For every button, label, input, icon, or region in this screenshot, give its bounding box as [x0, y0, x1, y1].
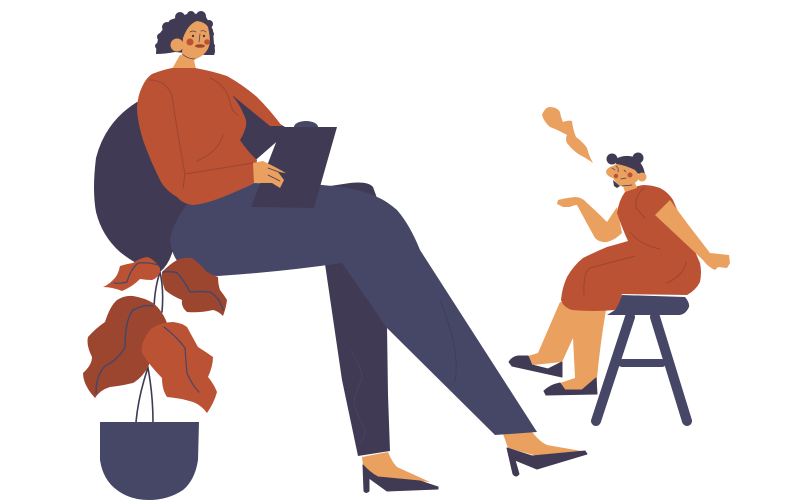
clipboard clip	[294, 121, 318, 133]
facial features	[612, 166, 632, 186]
raised arm	[557, 197, 622, 242]
back leg crease	[351, 351, 365, 444]
leaf: top right	[162, 258, 227, 316]
clipboard	[251, 127, 337, 208]
leaf: big right	[142, 322, 217, 413]
dress folds	[584, 188, 686, 295]
stool seat	[607, 295, 689, 315]
leaf vein	[96, 306, 153, 393]
back shoe	[363, 465, 438, 492]
trouser crease	[440, 300, 456, 382]
plant	[83, 257, 227, 500]
legs	[528, 302, 606, 391]
back foot	[362, 452, 430, 482]
hair	[155, 11, 215, 55]
hair buns	[606, 152, 645, 175]
leaf vein	[164, 327, 199, 392]
leaf: top left	[103, 257, 160, 291]
facial features	[182, 31, 210, 59]
front foot	[503, 432, 587, 456]
ear	[638, 172, 646, 182]
back leg	[325, 262, 390, 456]
stool crossbar	[622, 359, 662, 367]
sweater	[137, 68, 282, 205]
face	[606, 164, 639, 186]
stool	[596, 295, 689, 421]
left shoe	[509, 356, 562, 377]
hair back	[613, 180, 620, 188]
face	[182, 21, 210, 60]
neck	[172, 55, 196, 69]
right shoe	[544, 378, 597, 395]
neck	[622, 183, 637, 192]
dress	[561, 185, 701, 311]
finger lines	[268, 168, 284, 181]
chair: round dark backrest	[94, 95, 290, 272]
back arm	[655, 200, 730, 270]
knee behind	[330, 182, 377, 200]
leaf vein	[114, 263, 158, 283]
large woman	[137, 11, 587, 492]
front shoe	[507, 448, 587, 476]
stool legs	[596, 317, 687, 421]
speech wisp	[542, 107, 593, 163]
small woman	[509, 152, 730, 395]
hand	[253, 161, 286, 188]
leaf vein	[163, 272, 223, 310]
ear	[170, 38, 184, 52]
pot	[100, 422, 199, 500]
sweater folds	[150, 78, 253, 188]
plant stems	[136, 272, 163, 422]
trousers front leg	[170, 183, 537, 435]
leaf: big left	[83, 296, 167, 398]
